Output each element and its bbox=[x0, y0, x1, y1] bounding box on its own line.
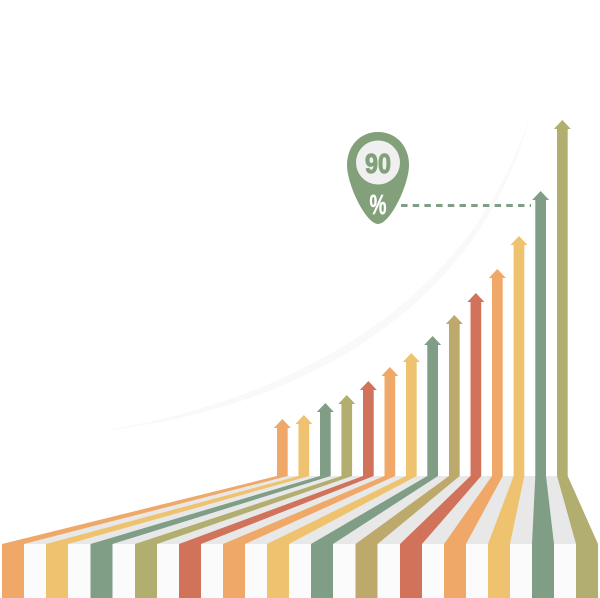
arrow 3 green bbox=[90, 403, 334, 598]
arrow 13 green bbox=[532, 191, 554, 598]
arrow 5 red bbox=[179, 381, 377, 598]
arrow 1 orange bbox=[2, 419, 291, 598]
floor: front wall bbox=[2, 544, 598, 598]
arrow 14 olive bbox=[554, 120, 598, 598]
arrow 4 olive bbox=[135, 395, 355, 598]
arrow 9 tan bbox=[356, 315, 463, 598]
value 90: 90 bbox=[365, 148, 391, 179]
pin body bbox=[347, 132, 409, 224]
arrow 6 orange bbox=[223, 367, 398, 598]
percent sign: % bbox=[370, 189, 387, 220]
pin inner circle bbox=[356, 140, 400, 184]
arrow 7 yellow bbox=[267, 353, 420, 598]
faint growth curve bbox=[100, 112, 531, 431]
callout pin: 90% bbox=[347, 132, 409, 224]
arrow chart bbox=[2, 120, 598, 598]
dashed leader line bbox=[401, 204, 531, 207]
arrow 8 green bbox=[311, 336, 441, 598]
arrow 12 yellow bbox=[488, 236, 527, 598]
arrow 10 red bbox=[400, 293, 484, 598]
floor: grey perspective band bbox=[24, 476, 576, 544]
arrow 2 yellow bbox=[46, 415, 312, 598]
arrow 11 orange bbox=[444, 269, 506, 598]
